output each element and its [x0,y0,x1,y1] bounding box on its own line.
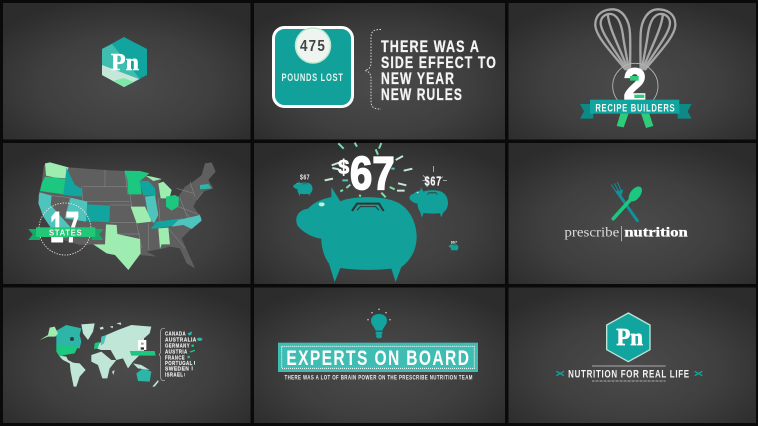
ribbon: states: STATES [49,228,82,238]
panel: recipe builders [508,3,756,140]
world map [40,322,159,387]
banner [278,343,478,372]
scale card [274,28,352,106]
money rays [325,143,412,197]
small pig left: $67 [300,175,310,182]
amount $67 [338,147,395,199]
number 9 [138,340,146,350]
small pig left [293,175,313,196]
amount $67: 67 [350,147,395,199]
panel: nutrition for real life [508,288,756,423]
headline text: SIDE EFFECT TO [381,54,497,72]
banner: EXPERTS ON BOARD [286,347,470,370]
amount $67: $ [338,156,350,179]
panel: logo [3,3,250,140]
panel: piggy banks [254,143,505,284]
panel: experts on board [254,288,505,423]
panel: prescribe nutrition logo [508,143,756,284]
headline text: NEW RULES [381,86,463,104]
divider bottom [592,379,666,382]
country list: GERMANY [165,343,190,349]
country list: SWEDEN [165,367,189,373]
subheading: THERE WAS A LOT OF BRAIN POWER ON THE PRESCRIBE NUTRITION TEAM [284,374,473,381]
headline text: NEW YEAR [381,70,455,88]
icon: crossed whisks [595,9,675,109]
whisk handles [617,112,653,128]
wordmark: prescribe [564,226,619,241]
headline text: THERE WAS A [381,38,480,56]
number 2: 2 [624,61,647,109]
right ornament [695,371,702,376]
country list: PORTUGAL [165,361,193,367]
icon: Pn hexagon logo: Pn [111,50,139,76]
country list: FRANCE [165,355,185,361]
ribbon banner: RECIPE BUILDERS [595,102,675,114]
number 17: 17 [50,203,81,252]
panel: world map [3,288,250,423]
country list [165,331,197,379]
country list: AUSTRIA [165,349,188,355]
US map [38,162,216,270]
left ornament [556,371,564,376]
dotted brace [365,30,381,109]
icon: Pn hexagon [607,313,650,362]
ribbon [130,351,156,356]
scale card: 475 [300,38,326,55]
panel: 17 states [3,143,250,284]
panel: pounds lost [254,3,505,140]
tagline: NUTRITION FOR REAL LIFE [568,369,690,381]
tiny pig: $67 [451,241,457,245]
wordmark [564,226,688,241]
icon: crossed fork and spoon [611,182,645,221]
headline text [381,38,497,104]
tiny pig [449,241,458,251]
medium pig right: $67 [425,173,442,188]
icon: Pn hexagon logo [102,37,147,87]
country list: CANADA [165,331,186,337]
main pig [296,187,417,282]
icon: light bulb [367,308,391,338]
ribbon: states [28,227,103,240]
country list: ISRAEL [165,373,183,379]
dotted circle [39,203,91,255]
scale card: POUNDS LOST [282,72,344,84]
brace [159,328,165,381]
medium pig right [410,166,448,217]
country list: AUSTRALIA [165,337,197,343]
icon: Pn hexagon: Pn [616,325,643,351]
country shapes [184,331,202,376]
divider top [592,365,666,367]
wordmark: nutrition [624,226,688,241]
